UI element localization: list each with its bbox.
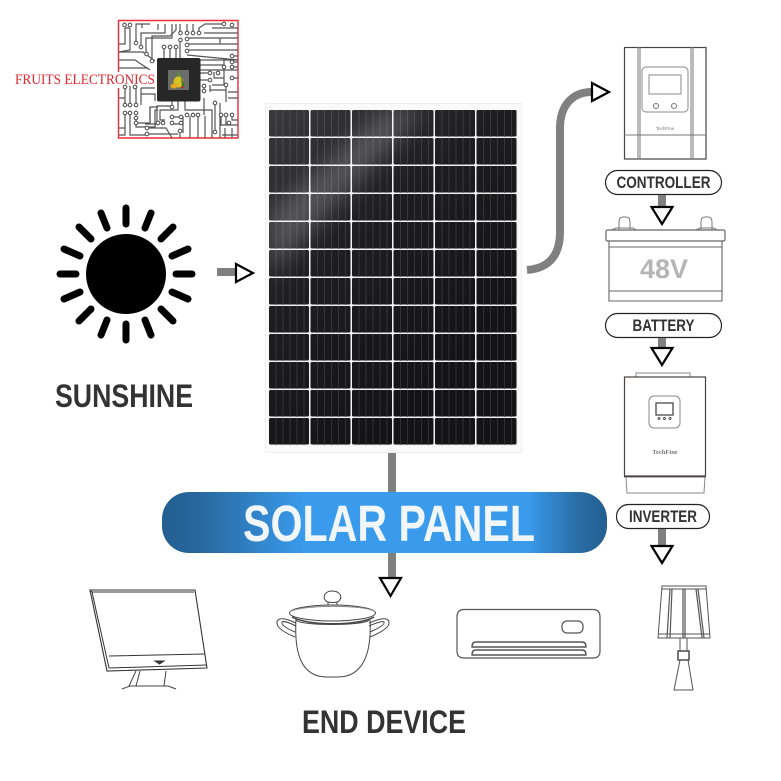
icon: monitor [90, 590, 207, 689]
icon: sun [60, 208, 192, 340]
arrow: panel to controller [527, 83, 609, 270]
banner: solar panel: SOLAR PANEL [243, 495, 535, 552]
heading: end device: END DEVICE [302, 704, 466, 740]
label: battery [606, 314, 722, 338]
battery voltage: 48V [640, 254, 688, 284]
label: inverter [616, 504, 710, 528]
logo circuit traces [119, 24, 238, 138]
logo circuit frame [118, 20, 238, 138]
inverter brand: TechFine [652, 449, 678, 456]
logo text: FRUITS ELECTRONICS [15, 72, 155, 88]
solar cells grid [269, 110, 518, 446]
label: inverter: INVERTER [629, 508, 697, 526]
logo chip [157, 58, 200, 102]
logo circuit nodes [123, 22, 234, 136]
icon: air conditioner [457, 610, 600, 658]
label: battery: BATTERY [632, 317, 694, 335]
icon: pot [277, 591, 389, 677]
heading: sunshine: SUNSHINE [55, 378, 193, 414]
arrow: inverter to lamp [652, 529, 672, 563]
icon: controller [624, 47, 706, 159]
controller brand: TechFine [656, 126, 675, 131]
icon: lamp [658, 586, 710, 690]
label: controller [606, 170, 722, 194]
arrow: controller to battery [652, 195, 672, 224]
label: controller: CONTROLLER [616, 174, 711, 192]
arrow: battery to inverter [652, 338, 672, 365]
arrow: end device [380, 578, 401, 596]
panel: solar module [266, 104, 522, 452]
connector: panel to end device [388, 453, 396, 578]
logo fruit image [168, 70, 189, 90]
panel sheen [269, 110, 518, 446]
arrow: sun to panel [217, 264, 253, 282]
logo: Fruits Electronics [15, 20, 238, 138]
icon: battery [606, 217, 725, 301]
icon: inverter [624, 373, 706, 493]
